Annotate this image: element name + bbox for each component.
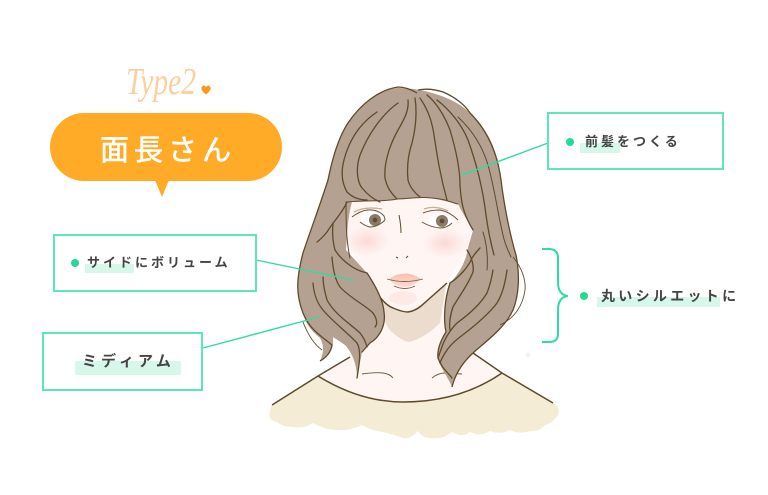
highlight bbox=[85, 264, 134, 273]
label: 前髪をつくる bbox=[585, 134, 681, 149]
nose bbox=[396, 215, 408, 258]
label: ミディアム bbox=[82, 353, 175, 370]
face bbox=[345, 195, 475, 312]
highlight bbox=[75, 361, 181, 375]
lips bbox=[387, 274, 423, 288]
bullet bbox=[71, 259, 79, 267]
bubble heading: 面長さん bbox=[100, 127, 236, 169]
eyes and brows bbox=[352, 207, 458, 228]
callout: round silhouette bbox=[580, 288, 739, 307]
hair bbox=[298, 87, 525, 387]
callout: medium bbox=[42, 332, 203, 391]
speech bubble bbox=[50, 113, 282, 197]
decorative dot bbox=[526, 352, 530, 358]
type label: Type2 bbox=[126, 61, 196, 103]
callout: side volume bbox=[53, 234, 257, 292]
bullet bbox=[566, 138, 574, 146]
sweater bbox=[269, 373, 559, 438]
connector: medium bbox=[203, 317, 319, 348]
bangs and hair strands bbox=[313, 95, 511, 378]
neck and chest bbox=[318, 285, 502, 402]
label: サイドにボリューム bbox=[87, 255, 231, 270]
callout: bangs bbox=[547, 112, 724, 170]
highlight bbox=[597, 297, 720, 307]
connector: side volume bbox=[256, 260, 353, 280]
bullet bbox=[580, 292, 588, 300]
icon: heart bbox=[201, 86, 211, 94]
label: 丸いシルエットに bbox=[601, 288, 739, 304]
bracket bbox=[542, 249, 568, 342]
connector: bangs bbox=[462, 143, 548, 175]
highlight bbox=[580, 143, 620, 153]
